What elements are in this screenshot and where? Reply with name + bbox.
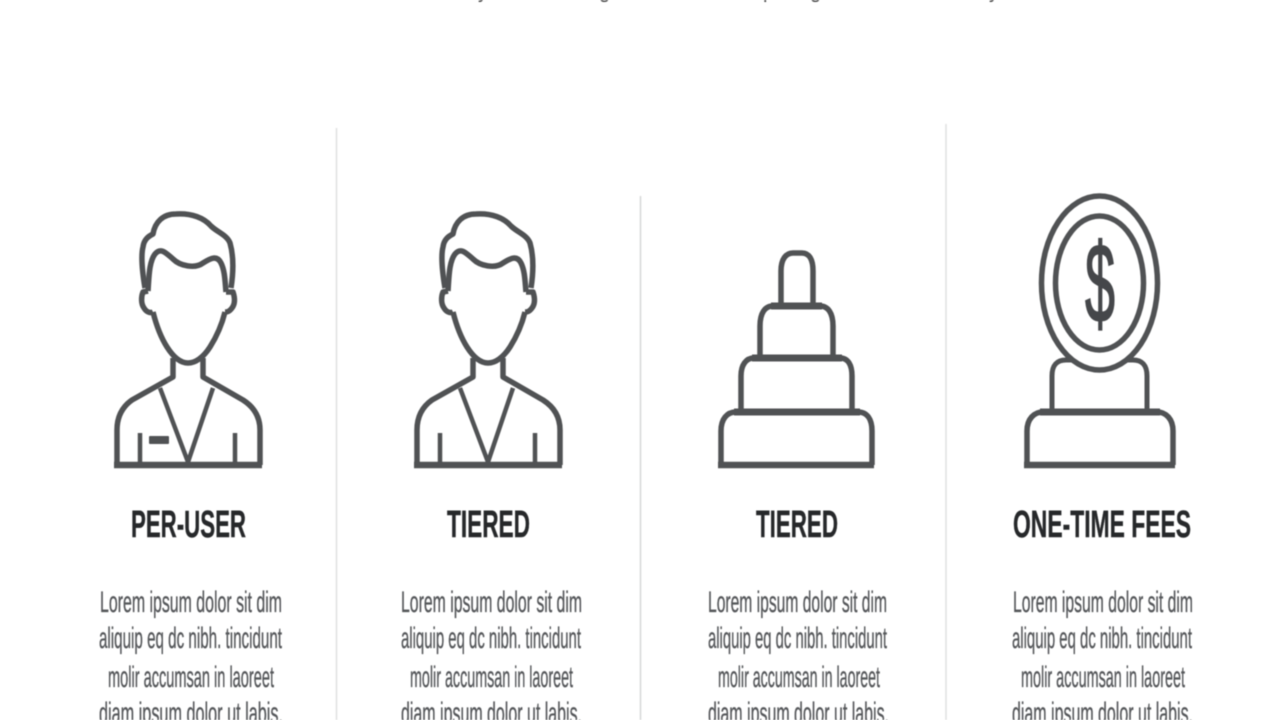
text block: tiered description: Lorem ipsum dolor sit dim bbox=[401, 586, 582, 619]
text block: tiered description: aliquip eq dc nibh. tincidunt bbox=[401, 622, 581, 655]
panel: tiered (person) bbox=[401, 214, 582, 720]
heading: per-user: PER-USER bbox=[131, 504, 246, 546]
panel: per-user bbox=[99, 214, 283, 720]
clipped subtitle at top edge bbox=[478, 0, 999, 3]
text block: tiered description: aliquip eq dc nibh. tincidunt bbox=[708, 622, 887, 655]
panel: one-time fees bbox=[1012, 196, 1193, 720]
heading: tiered: TIERED bbox=[756, 504, 838, 546]
text block: tiered description: molir accumsan in laoreet bbox=[410, 661, 573, 694]
text block: one-time fees description bbox=[1012, 586, 1193, 720]
icon: coin on pedestal bbox=[1024, 196, 1175, 465]
text block: tiered description: Lorem ipsum dolor sit dim bbox=[708, 586, 887, 619]
text block: per-user description bbox=[99, 586, 283, 720]
icon: person bbox=[414, 214, 562, 465]
icon: person with name tag bbox=[114, 214, 262, 465]
text block: tiered description bbox=[401, 586, 582, 720]
panel: tiered (stack) bbox=[708, 253, 889, 720]
heading: tiered: TIERED bbox=[447, 504, 530, 546]
text block: per-user description: aliquip eq dc nibh. tincidunt bbox=[99, 622, 282, 655]
panel: one-time fees: $ bbox=[1085, 221, 1115, 346]
text block: per-user description: molir accumsan in laoreet bbox=[108, 661, 274, 694]
text block: per-user description: Lorem ipsum dolor sit dim bbox=[100, 586, 282, 619]
text block: tiered description: molir accumsan in laoreet bbox=[718, 661, 880, 694]
icon: stacked tiers bbox=[718, 253, 874, 465]
text block: tiered description bbox=[708, 586, 889, 720]
